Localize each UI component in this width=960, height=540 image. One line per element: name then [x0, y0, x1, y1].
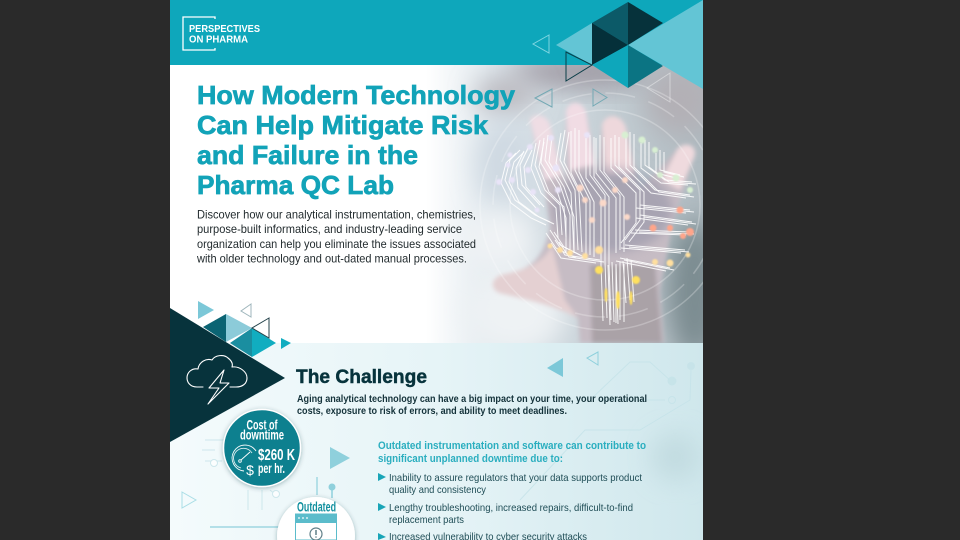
header banner	[170, 0, 703, 65]
intro text: Discover how our analytical instrumentation, chemistries,	[197, 208, 476, 222]
circuit brain nodes	[496, 132, 694, 309]
intro text: purpose-built informatics, and industry-leading service	[197, 222, 462, 236]
title: Can Help Mitigate Risk	[197, 110, 489, 140]
bullet list	[378, 472, 642, 540]
hero photo: hand with circuit brain	[442, 65, 703, 343]
callout: cost of downtime: per hr.	[258, 461, 285, 476]
logo: Perspectives on Pharma	[183, 17, 260, 50]
heading: The Challenge: The Challenge	[296, 367, 427, 388]
callout: cost of downtime: downtime	[240, 428, 284, 442]
callout: outdated	[277, 497, 355, 540]
faint circuit lines	[202, 362, 694, 510]
intro text: with older technology and out-dated manual processes.	[196, 252, 467, 266]
bullet list: replacement parts	[389, 514, 464, 526]
downtime heading: significant unplanned downtime due to:	[378, 453, 563, 465]
callout: cost of downtime	[224, 410, 300, 486]
circuit node	[328, 484, 336, 498]
intro text: organization can help you eliminate the issues associated	[197, 237, 476, 251]
challenge description	[297, 393, 647, 417]
icon: storm cloud	[187, 356, 247, 404]
bullet list: Inability to assure regulators that your data supports product	[389, 472, 642, 484]
challenge description: Aging analytical technology can have a big impact on your time, your operational	[297, 393, 647, 405]
challenge description: costs, exposure to risk of errors, and ability to meet deadlines.	[297, 405, 567, 417]
icon: alert window	[295, 514, 337, 540]
title: and Failure in the	[197, 140, 418, 170]
logo: Perspectives on Pharma: ON PHARMA	[189, 33, 248, 45]
intro text	[196, 208, 476, 266]
logo: Perspectives on Pharma: PERSPECTIVES	[189, 23, 260, 35]
panel: the challenge background	[170, 343, 703, 540]
hand silhouette	[493, 103, 695, 343]
callout: cost of downtime: Cost of	[246, 418, 278, 432]
faint technology rings	[480, 79, 703, 331]
icon: gauge with dollar: $	[246, 462, 254, 478]
decorative triangle cluster: section divider	[198, 301, 291, 357]
bullet list: Lengthy troubleshooting, increased repairs, difficult-to-find	[389, 502, 633, 514]
circuit brain traces	[505, 128, 692, 322]
decorative triangle cluster: top right	[533, 0, 703, 107]
callout: outdated: Outdated	[297, 500, 336, 514]
downtime heading: Outdated instrumentation and software can contribute to	[378, 440, 646, 452]
bullet list: quality and consistency	[389, 484, 487, 496]
dark triangle with cloud icon	[170, 308, 285, 442]
title: Pharma QC Lab	[197, 170, 394, 200]
infographic canvas	[170, 0, 703, 540]
callout: cost of downtime: $260 K	[258, 447, 295, 464]
downtime heading	[378, 440, 646, 465]
title	[197, 80, 516, 200]
title: How Modern Technology	[197, 80, 516, 110]
